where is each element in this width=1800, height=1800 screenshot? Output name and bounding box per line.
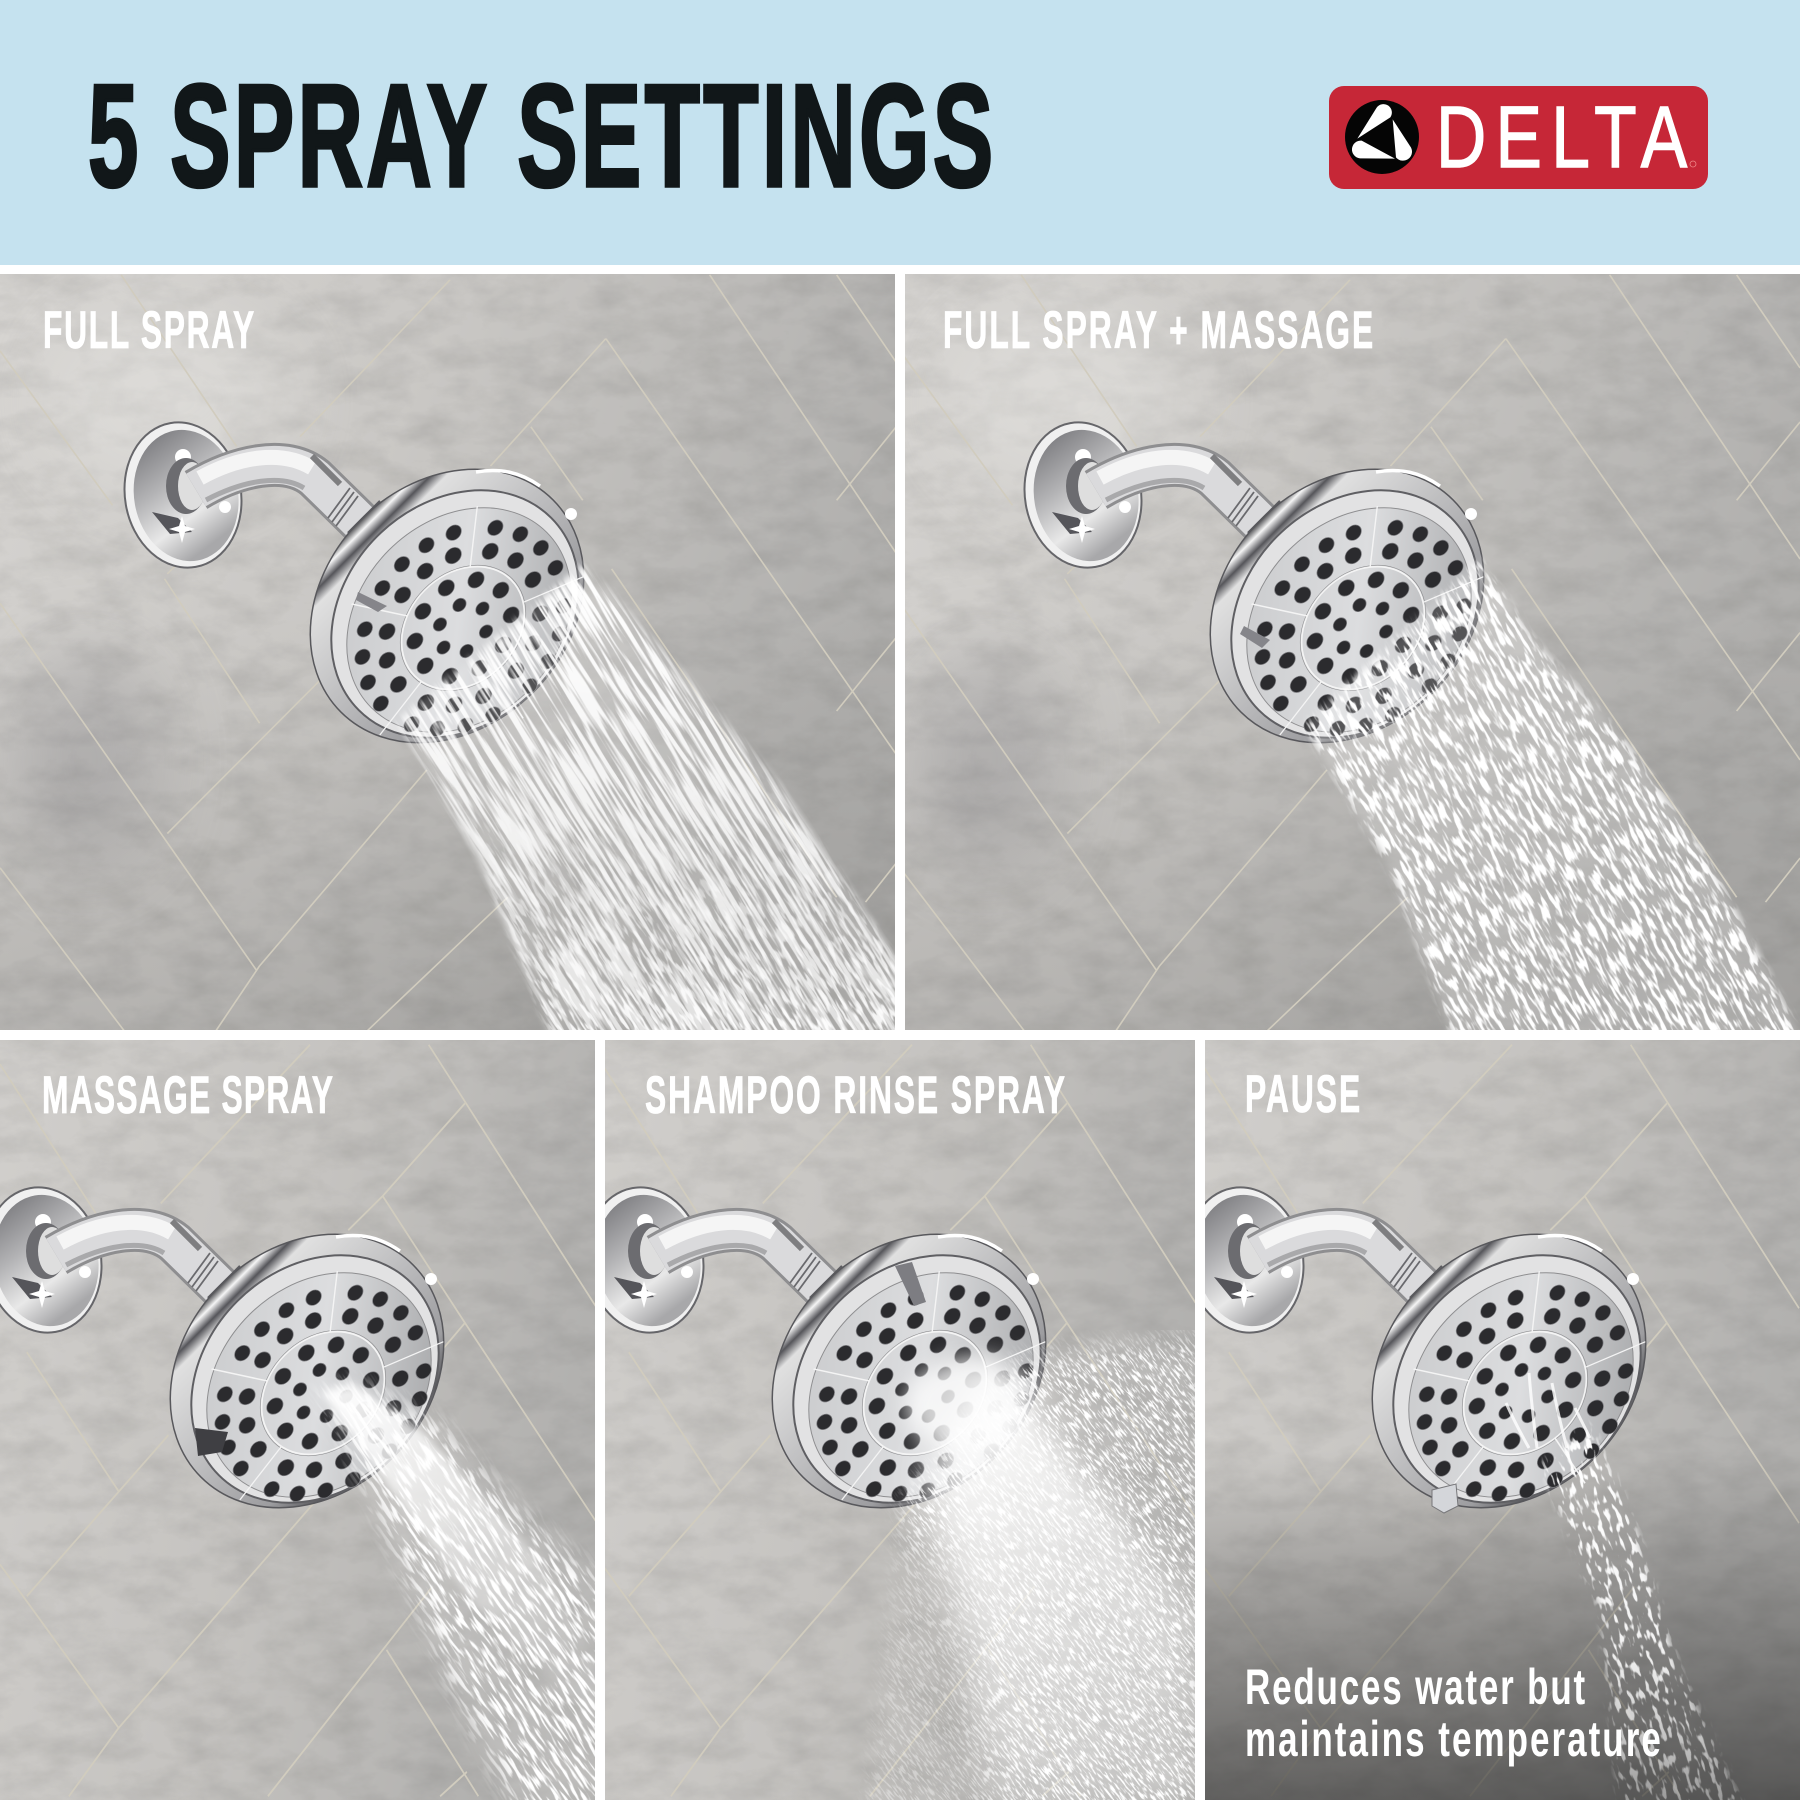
- callout: pause description: Reduces water but: [1245, 1660, 1585, 1716]
- water: full spray: [396, 560, 895, 1030]
- callout: pause description: [1245, 1660, 1661, 1768]
- logo: Delta: [1329, 86, 1708, 189]
- label: pause: PAUSE: [1245, 1065, 1360, 1124]
- water: pause: [1504, 1373, 1742, 1800]
- water: shampoo rinse spray: [850, 1330, 1195, 1800]
- water: massage spray: [300, 1370, 595, 1800]
- panel: full spray + massage: [900, 270, 1800, 1040]
- header band: [0, 0, 1800, 265]
- label: full spray + massage: FULL SPRAY + MASSAGE: [943, 301, 1373, 360]
- callout: pause description: maintains temperature: [1245, 1712, 1661, 1768]
- panel: pause: [1175, 1035, 1800, 1800]
- label: shampoo rinse spray: SHAMPOO RINSE SPRAY: [645, 1066, 1065, 1125]
- title: 5 SPRAY SETTINGS: [88, 54, 993, 217]
- panel: shampoo rinse spray: [575, 1035, 1202, 1800]
- water: full spray + massage: [1300, 556, 1800, 1030]
- label: full spray: FULL SPRAY: [43, 301, 254, 360]
- panel: massage spray: [0, 1035, 600, 1800]
- panel: full spray: [0, 270, 900, 1040]
- logo: Delta: DELTA: [1436, 89, 1688, 186]
- label: massage spray: MASSAGE SPRAY: [42, 1066, 333, 1125]
